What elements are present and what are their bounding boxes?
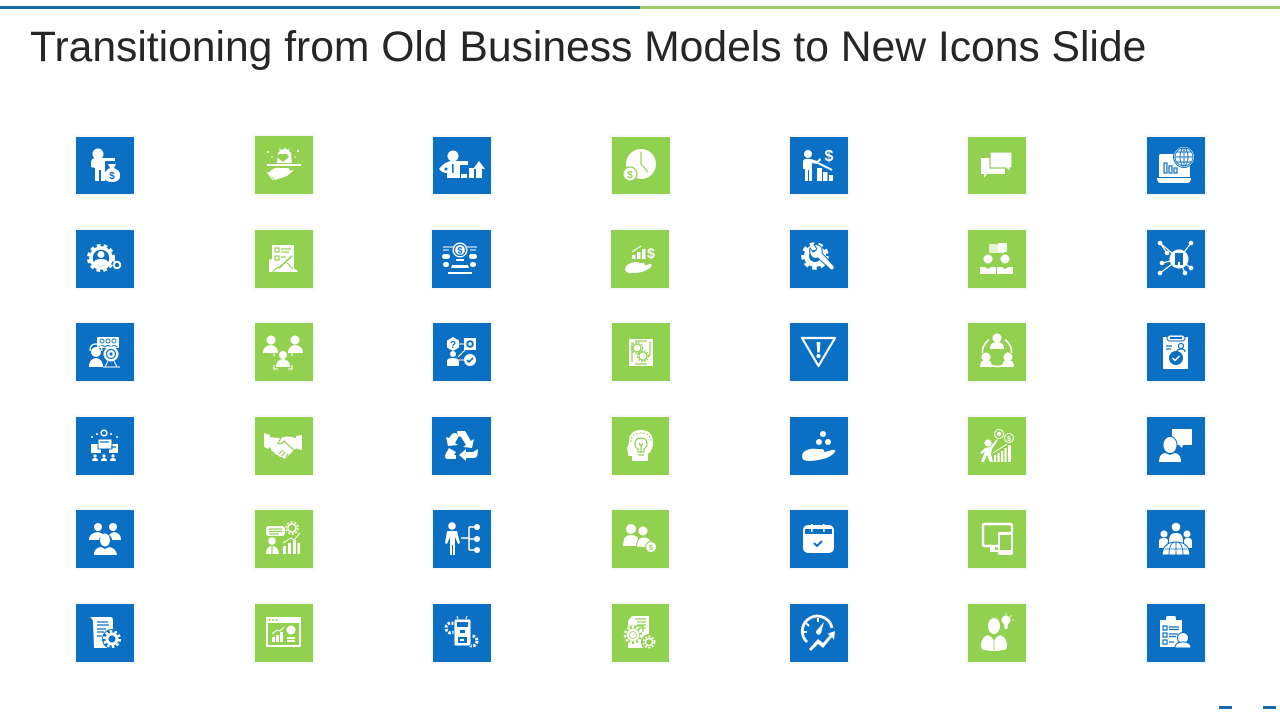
- icon: network around building: [1145, 228, 1207, 290]
- icon: person with rising chart: [431, 135, 493, 196]
- top rule: blue segment: [0, 6, 640, 9]
- icon: handshake: [253, 415, 315, 475]
- icon: head with light bulb: [610, 415, 672, 475]
- icon: person climbing growth chart: $: [1007, 436, 1011, 443]
- icon: clipboard checklist with person: [1145, 602, 1207, 664]
- icon: person with idea bulb: [966, 602, 1028, 664]
- icon: monitor and smartphone: [966, 508, 1028, 570]
- icon: dollar network with tray: $: [457, 246, 463, 256]
- icon: gear with person: [74, 228, 136, 290]
- icon: three people in focus frame: [253, 321, 315, 383]
- icon: device with gears: [431, 602, 493, 664]
- icon: person with hierarchy: [431, 508, 493, 570]
- icon: hand with growth and dollar: $: [647, 245, 655, 261]
- icon: people with dollar coin: [610, 508, 672, 570]
- icon: problem solving process: [431, 321, 493, 383]
- icon: global team: [1145, 508, 1207, 570]
- footer dash left: [1219, 706, 1232, 709]
- icon: three people group: [74, 508, 136, 570]
- icon: problem solving process: ?: [450, 340, 456, 351]
- icon: presenter with dollar chart: [788, 135, 850, 196]
- icon: clock with coin: [610, 135, 672, 196]
- icon: team and target board: [74, 321, 136, 383]
- icon: clock with coin: $: [627, 170, 633, 181]
- icon: three people in a cycle: [966, 321, 1028, 383]
- icon: two people discussing: [966, 228, 1028, 290]
- icon: manager with money bag: $: [109, 171, 115, 182]
- icon: document with gears: [610, 321, 672, 383]
- icon: document with hand and pen: [253, 228, 315, 290]
- title: Transitioning from Old Business Models to New Icons Slide: [30, 23, 1146, 71]
- icon: meeting with message bubbles: [74, 415, 136, 475]
- footer dash right: [1263, 706, 1276, 709]
- icon: recycle arrows: [430, 415, 493, 475]
- icon: dollar network with tray: [430, 228, 492, 290]
- icon: speedometer with rising arrow: [788, 602, 850, 664]
- icon: chat bubbles: [966, 135, 1028, 196]
- icon: calendar with check: [788, 508, 850, 570]
- icon: browser dashboard: [253, 602, 315, 664]
- icon: hand with growth and dollar: [609, 228, 671, 290]
- icon: warning triangle: [788, 321, 850, 383]
- top rule: green segment: [640, 6, 1280, 9]
- icon: hand with dots: [788, 415, 850, 475]
- icon: laptop with globe: [1145, 135, 1207, 196]
- icon: people with dollar coin: $: [649, 545, 653, 552]
- icon: clipboard with check: [1145, 321, 1207, 383]
- icon: manager with money bag: [74, 135, 136, 196]
- icon: document with gears and puzzle: [610, 602, 672, 664]
- icon: person climbing growth chart: [966, 415, 1028, 475]
- icon: document with gear: [74, 602, 136, 664]
- icon: person with speech bubble: [1145, 415, 1207, 475]
- icon: gear with wrench: [788, 228, 850, 290]
- icon: hand holding gem on tray: [253, 134, 315, 196]
- icon: presenter with dollar chart: $: [825, 148, 834, 165]
- icon: presenter with gear and chart: [253, 508, 315, 570]
